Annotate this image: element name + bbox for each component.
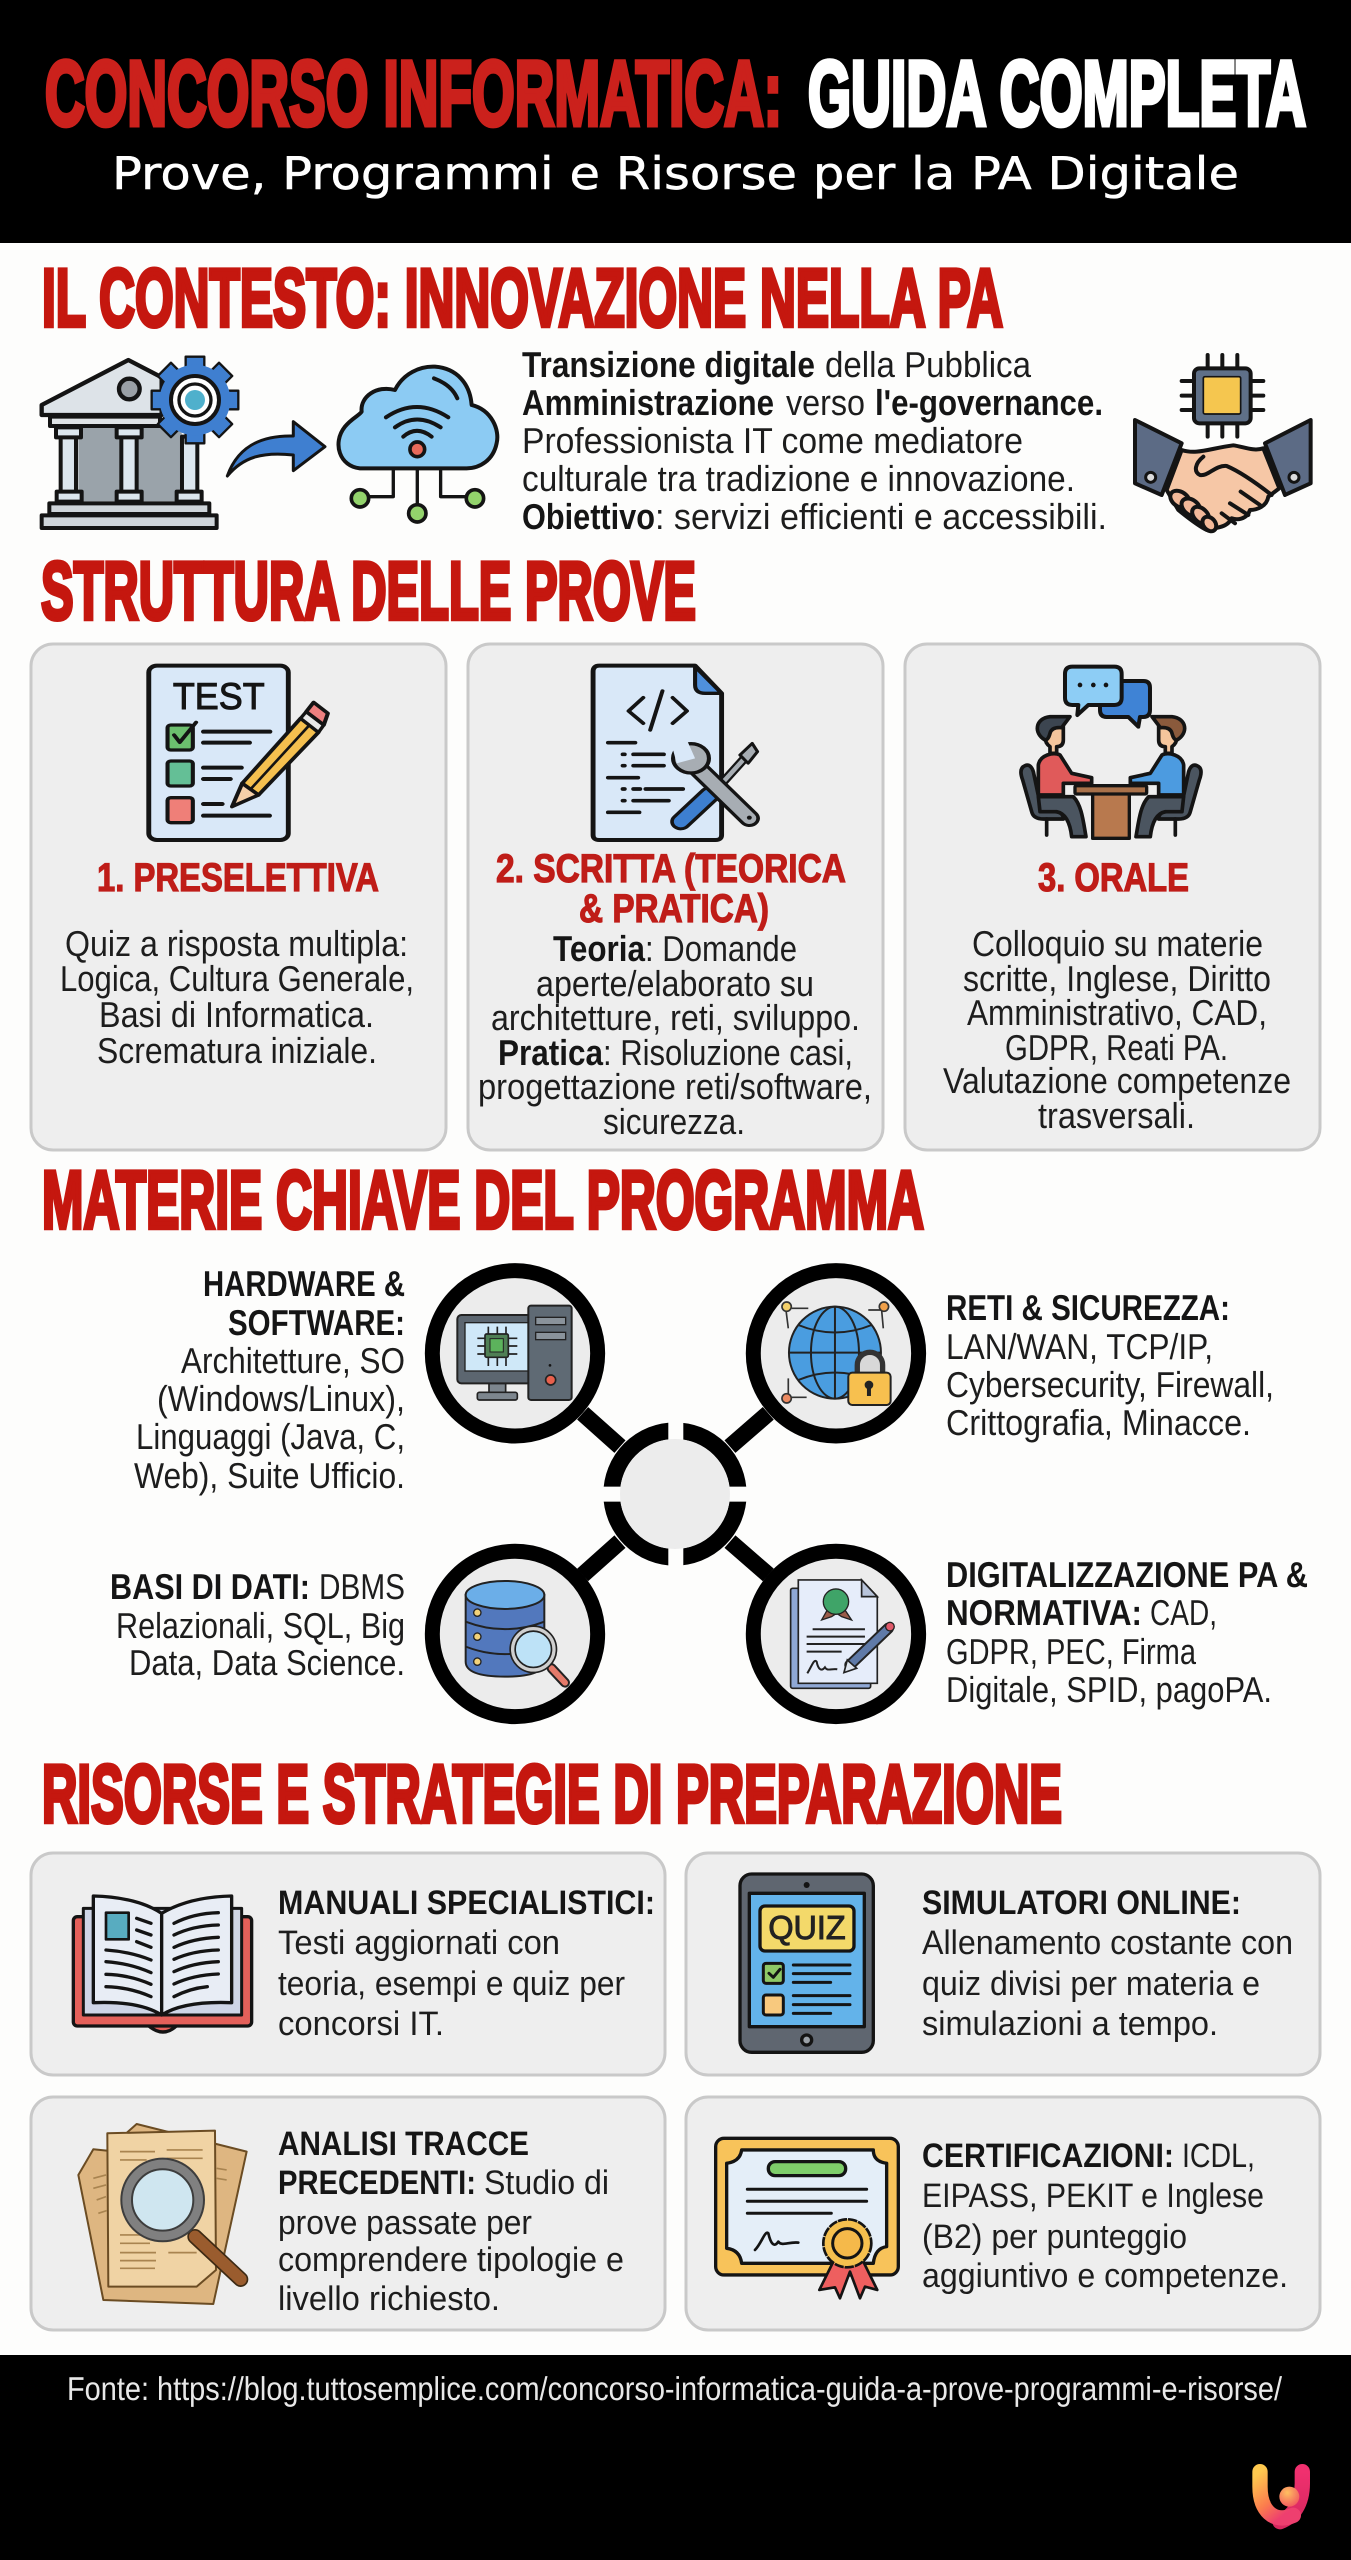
resource text: EIPASS, PEKIT e Inglese <box>922 2177 1264 2215</box>
resource text: teoria, esempi e quiz per <box>278 1965 625 2003</box>
panel: orale <box>905 644 1320 1150</box>
text: hardware e software: Linguaggi (Java, C, <box>136 1416 405 1457</box>
icon: certificate with medal <box>716 2138 898 2298</box>
panel: manuali <box>31 1853 665 2075</box>
arrow <box>227 422 325 476</box>
stage description <box>60 923 414 1071</box>
text: hardware e software: HARDWARE & <box>203 1263 405 1304</box>
resource text: Studio di <box>484 2164 609 2202</box>
stage description: : Domande <box>645 928 797 969</box>
resource text: (B2) per punteggio <box>922 2218 1187 2256</box>
text: hardware e software: Architetture, SO <box>181 1340 405 1381</box>
context text block: l'e-governance. <box>875 382 1103 423</box>
stage description: : Risoluzione casi, <box>603 1032 853 1073</box>
context text block: della Pubblica <box>825 344 1032 385</box>
stage description: Amministrativo, CAD, <box>967 992 1267 1033</box>
context text block: verso <box>786 382 865 423</box>
panel: scritta <box>468 644 883 1150</box>
hub diagram <box>432 1271 919 1717</box>
central node <box>600 1420 750 1568</box>
text: reti e sicurezza: RETI & SICUREZZA: <box>946 1287 1230 1328</box>
resource text: prove passate per <box>278 2204 532 2242</box>
stage description: progettazione reti/software, <box>478 1066 872 1107</box>
text: digitalizzazione: GDPR, PEC, Firma <box>946 1631 1197 1672</box>
connectors <box>583 1413 768 1575</box>
icon: two people talking at a table <box>1021 667 1201 838</box>
text: reti e sicurezza <box>946 1287 1274 1443</box>
stage description: Logica, Cultura Generale, <box>60 958 414 999</box>
resource text: PRECEDENTI: <box>278 2164 476 2202</box>
resource text: ANALISI TRACCE <box>278 2125 529 2163</box>
text: digitalizzazione <box>946 1554 1308 1710</box>
resource text: quiz divisi per materia e <box>922 1965 1260 2003</box>
stage description: scritte, Inglese, Diritto <box>963 958 1271 999</box>
panel: preselettiva <box>31 644 446 1150</box>
context text block: Transizione digitale <box>522 344 815 385</box>
header band <box>0 0 1351 243</box>
text: hardware e software <box>134 1263 405 1496</box>
node: signed document <box>753 1551 919 1717</box>
text: reti e sicurezza: Crittografia, Minacce. <box>946 1402 1251 1443</box>
resource text: aggiuntivo e competenze. <box>922 2257 1288 2295</box>
stage description <box>478 928 872 1142</box>
icon: open book <box>73 1896 252 2032</box>
context text block: culturale tra tradizione e innovazione. <box>522 458 1075 499</box>
context text block: Professionista IT come mediatore <box>522 420 1023 461</box>
stage title: 2. SCRITTA (TEORICA <box>496 847 846 891</box>
resource text: Testi aggiornati con <box>278 1924 560 1962</box>
icon: cloud network <box>338 367 497 522</box>
stage description: trasversali. <box>1038 1095 1195 1136</box>
resource text: comprendere tipologie e <box>278 2241 624 2279</box>
icon: handshake with chip <box>1135 355 1311 534</box>
context text block: Amministrazione <box>522 382 774 423</box>
resource text <box>278 1884 655 2043</box>
text: basi di dati: Relazionali, SQL, Big <box>116 1605 405 1646</box>
text: basi di dati <box>110 1566 405 1683</box>
resource text: livello richiesto. <box>278 2280 500 2318</box>
icon: quiz tablet: QUIZ <box>768 1909 846 1946</box>
stage description: aperte/elaborato su <box>536 963 814 1004</box>
stage description: Quiz a risposta multipla: <box>65 923 408 964</box>
stage description: Pratica <box>498 1032 604 1073</box>
resource text: concorsi IT. <box>278 2005 444 2043</box>
subtitle: Prove, Programmi e Risorse per la PA Digitale <box>112 147 1239 200</box>
stage title: & PRATICA) <box>579 887 769 931</box>
logo <box>1260 2472 1302 2522</box>
resource text: SIMULATORI ONLINE: <box>922 1884 1241 1922</box>
stage description: Basi di Informatica. <box>99 994 374 1035</box>
text: digitalizzazione: CAD, <box>1150 1592 1217 1633</box>
context text block: : servizi efficienti e accessibili. <box>655 496 1107 537</box>
node: globe and lock <box>753 1271 919 1436</box>
text: reti e sicurezza: Cybersecurity, Firewall, <box>946 1364 1274 1405</box>
resource text: Allenamento costante con <box>922 1924 1293 1962</box>
text: basi di dati: Data, Data Science. <box>129 1642 405 1683</box>
resource text: MANUALI SPECIALISTICI: <box>278 1884 655 1922</box>
text: reti e sicurezza: LAN/WAN, TCP/IP, <box>946 1326 1213 1367</box>
context text block: Obiettivo <box>522 496 655 537</box>
stage description <box>943 923 1291 1136</box>
resource text <box>922 1884 1293 2043</box>
icon: bank with gear <box>42 357 238 528</box>
resource text: simulazioni a tempo. <box>922 2005 1218 2043</box>
stage description: Valutazione competenze <box>943 1060 1291 1101</box>
panel: simulatori <box>686 1853 1320 2075</box>
stage description: Teoria <box>553 928 646 969</box>
text: digitalizzazione: Digitale, SPID, pagoPA. <box>946 1669 1272 1710</box>
text: basi di dati: DBMS <box>319 1566 405 1607</box>
text: hardware e software: (Windows/Linux), <box>157 1378 405 1419</box>
stage description: Colloquio su materie <box>972 923 1263 964</box>
stage title: 3. ORALE <box>1038 856 1189 900</box>
text: hardware e software: SOFTWARE: <box>228 1302 405 1343</box>
footer band <box>0 2355 1351 2560</box>
stage title: 1. PRESELETTIVA <box>97 856 379 900</box>
text: hardware e software: Web), Suite Ufficio. <box>134 1455 405 1496</box>
stage title <box>496 847 846 931</box>
resource text: CERTIFICAZIONI: <box>922 2137 1174 2175</box>
icon: quiz tablet <box>740 1874 873 2052</box>
icon: test sheet with pencil: TEST <box>173 675 265 717</box>
heading: struttura delle prove: STRUTTURA DELLE PROVE <box>41 546 696 637</box>
icon: old papers with magnifier <box>78 2124 247 2304</box>
text: basi di dati: BASI DI DATI: <box>110 1566 310 1607</box>
icon: test sheet with pencil <box>149 666 328 840</box>
node: database <box>432 1551 598 1717</box>
icon: code document with tools <box>593 666 758 840</box>
stage description: Scrematura iniziale. <box>97 1030 377 1071</box>
text: digitalizzazione: NORMATIVA: <box>946 1592 1142 1633</box>
node: computer <box>432 1271 598 1436</box>
stage description: architetture, reti, sviluppo. <box>491 997 860 1038</box>
panel: certificazioni <box>686 2097 1320 2330</box>
context text block <box>522 344 1107 537</box>
resource text <box>922 2137 1288 2295</box>
resource text: ICDL, <box>1182 2137 1255 2175</box>
stage description: sicurezza. <box>603 1101 745 1142</box>
resource text <box>278 2125 624 2318</box>
stage description: GDPR, Reati PA. <box>1005 1027 1228 1068</box>
panel: analisi tracce <box>31 2097 665 2330</box>
title: CONCORSO INFORMATICA: <box>45 43 782 145</box>
